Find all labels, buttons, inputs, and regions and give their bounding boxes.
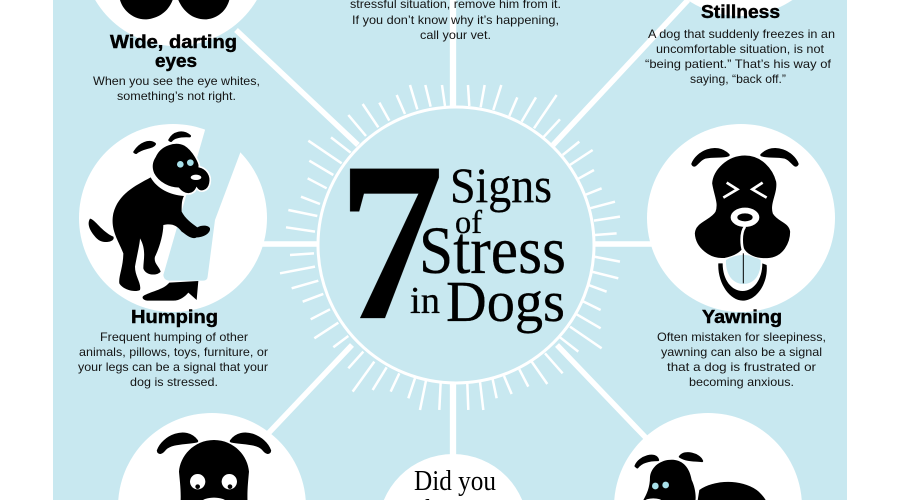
sign: bottom-left dog circle xyxy=(118,413,306,500)
central title circle xyxy=(318,107,594,383)
heading: Stillness xyxy=(701,2,780,22)
heading: Humping xyxy=(131,307,218,327)
icon: dog eyes xyxy=(120,0,229,19)
description xyxy=(93,74,260,103)
description: that a dog is frustrated or xyxy=(667,360,816,374)
sign: humping xyxy=(78,124,268,389)
heading: eyes xyxy=(155,51,197,71)
description: yawning can also be a signal xyxy=(661,345,822,359)
title: Signs of Stress in Dogs: Dogs xyxy=(446,269,565,334)
heading: did you know: Did you xyxy=(414,465,496,497)
title: 7: 7 xyxy=(338,116,444,368)
sign: top centre description: call your vet. xyxy=(420,28,491,42)
description: Often mistaken for sleepiness, xyxy=(657,330,826,344)
description: uncomfortable situation, is not xyxy=(656,42,825,56)
description: saying, “back off.” xyxy=(690,72,786,86)
icon: yawning dog xyxy=(693,149,797,301)
title: Signs of Stress in Dogs: in xyxy=(410,280,440,322)
description: animals, pillows, toys, furniture, or xyxy=(79,345,268,359)
heading xyxy=(110,32,237,71)
icon: worried dog xyxy=(158,434,270,500)
description: “being patient.” That’s his way of xyxy=(645,57,832,71)
sign: top centre description: If you don’t know why it’s happening, xyxy=(352,13,559,27)
sign: stillness xyxy=(645,0,835,86)
description xyxy=(645,27,835,86)
heading: Wide, darting xyxy=(110,32,237,52)
sign: top centre description xyxy=(350,0,561,42)
icon: crouching dog xyxy=(636,453,768,500)
sign: wide darting eyes xyxy=(82,0,270,103)
description: dog is stressed. xyxy=(130,375,218,389)
title: Signs of Stress in Dogs xyxy=(410,157,566,334)
sign: yawning xyxy=(647,124,835,389)
description: Frequent humping of other xyxy=(100,330,248,344)
title: Signs of Stress in Dogs: Signs xyxy=(450,157,552,213)
description: your legs can be a signal that your xyxy=(78,360,268,374)
heading: Yawning xyxy=(702,307,782,327)
description xyxy=(657,330,826,389)
description: A dog that suddenly freezes in an xyxy=(648,27,835,41)
description: When you see the eye whites, xyxy=(93,74,260,88)
title: Signs of Stress in Dogs: Stress xyxy=(419,212,566,288)
icon: humping dog xyxy=(89,127,247,301)
description: something’s not right. xyxy=(117,89,236,103)
sign: bottom-right dog circle xyxy=(614,413,802,500)
title: Signs of Stress in Dogs: of xyxy=(455,205,482,241)
description: becoming anxious. xyxy=(689,375,794,389)
description xyxy=(78,330,268,389)
sign: did you know circle xyxy=(378,454,528,500)
